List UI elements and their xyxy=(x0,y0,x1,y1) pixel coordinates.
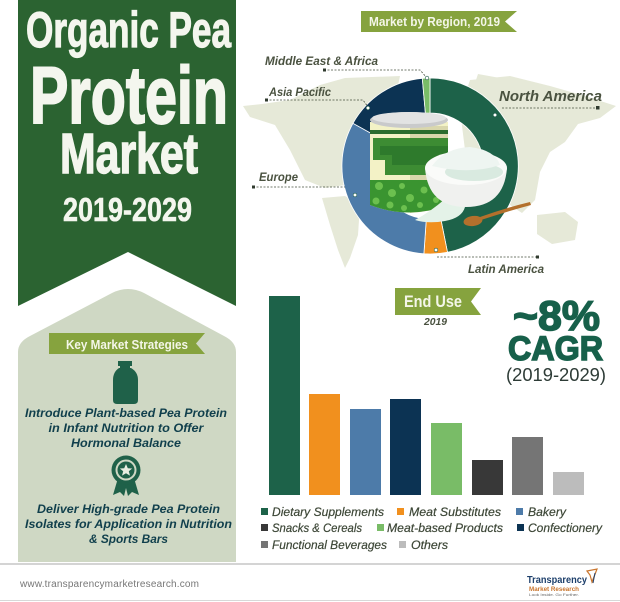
title text: Organic Pea xyxy=(26,2,232,58)
legend: Bakery xyxy=(528,505,567,519)
strategy text 1 xyxy=(25,406,227,450)
donut chart: market by region xyxy=(342,78,518,254)
powder heap xyxy=(415,198,465,222)
ribbon: end use: End Use xyxy=(404,292,462,311)
legend: Meat-based Products xyxy=(387,521,503,535)
strategy text 1: Introduce Plant-based Pea Protein xyxy=(25,406,227,420)
CAGR callout: ~8% xyxy=(513,292,600,339)
legend: Functional Beverages xyxy=(272,538,387,552)
region labels: Asia Pacific xyxy=(268,85,331,99)
title banner xyxy=(18,0,236,306)
ribbon: key market strategies: Key Market Strategies xyxy=(66,337,188,352)
illustration: pea can and bowl xyxy=(370,112,531,227)
legend: Dietary Supplements xyxy=(272,505,384,519)
panel: key market strategies xyxy=(18,289,236,562)
strategy text 2: Isolates for Application in Nutrition xyxy=(25,517,232,531)
logo: Transparency Market Research: Look Inside. Go Further. xyxy=(529,593,579,597)
legend xyxy=(261,505,603,552)
ribbon: end use xyxy=(395,288,481,315)
legend: Meat Substitutes xyxy=(409,505,501,519)
legend: Others xyxy=(411,538,448,552)
region labels: North America xyxy=(499,88,602,105)
CAGR callout xyxy=(506,292,606,385)
logo: Transparency Market Research: Transparency xyxy=(527,575,587,586)
segment: Europe xyxy=(342,123,426,254)
icon: award medal xyxy=(112,456,140,496)
region labels xyxy=(259,54,602,276)
region labels: Europe xyxy=(259,170,298,184)
strategy text 2: Deliver High-grade Pea Protein xyxy=(37,502,220,516)
region labels: Middle East & Africa xyxy=(265,54,378,68)
title text: 2019-2029 xyxy=(63,191,192,228)
website url: www.transparencymarketresearch.com xyxy=(19,579,199,590)
callout lines and markers xyxy=(253,70,597,257)
footer xyxy=(0,563,620,601)
logo: Transparency Market Research xyxy=(527,569,597,597)
legend: Confectionery xyxy=(528,521,603,535)
can xyxy=(370,112,448,213)
strategy text 1: in Infant Nutrition to Offer xyxy=(48,421,205,435)
ribbon: key market strategies xyxy=(49,333,205,354)
legend: Snacks & Cereals xyxy=(272,521,362,535)
segment: Asia Pacific xyxy=(353,78,425,140)
CAGR callout: CAGR xyxy=(508,330,603,368)
ribbon: market by region xyxy=(361,11,517,32)
CAGR callout: (2019-2029) xyxy=(506,365,606,385)
strategy text 2 xyxy=(25,502,232,546)
subheading: end use year: 2019 xyxy=(423,317,447,328)
title text: Protein xyxy=(30,51,228,141)
spoon xyxy=(463,202,531,227)
icon: bottle xyxy=(113,361,138,404)
title text: Market xyxy=(60,122,198,186)
segment: Latin America xyxy=(424,218,448,254)
segment: Middle East and Africa xyxy=(422,78,430,113)
segment: North America xyxy=(430,78,518,252)
bar chart: end use xyxy=(269,296,584,495)
logo: Transparency Market Research: Market Research xyxy=(529,586,579,593)
bowl xyxy=(425,147,507,207)
title text xyxy=(26,2,232,228)
world map xyxy=(243,74,616,268)
strategy text 2: & Sports Bars xyxy=(89,532,168,546)
ribbon: market by region: Market by Region, 2019 xyxy=(369,14,500,29)
strategy text 1: Hormonal Balance xyxy=(71,436,181,450)
region labels: Latin America xyxy=(468,262,544,276)
